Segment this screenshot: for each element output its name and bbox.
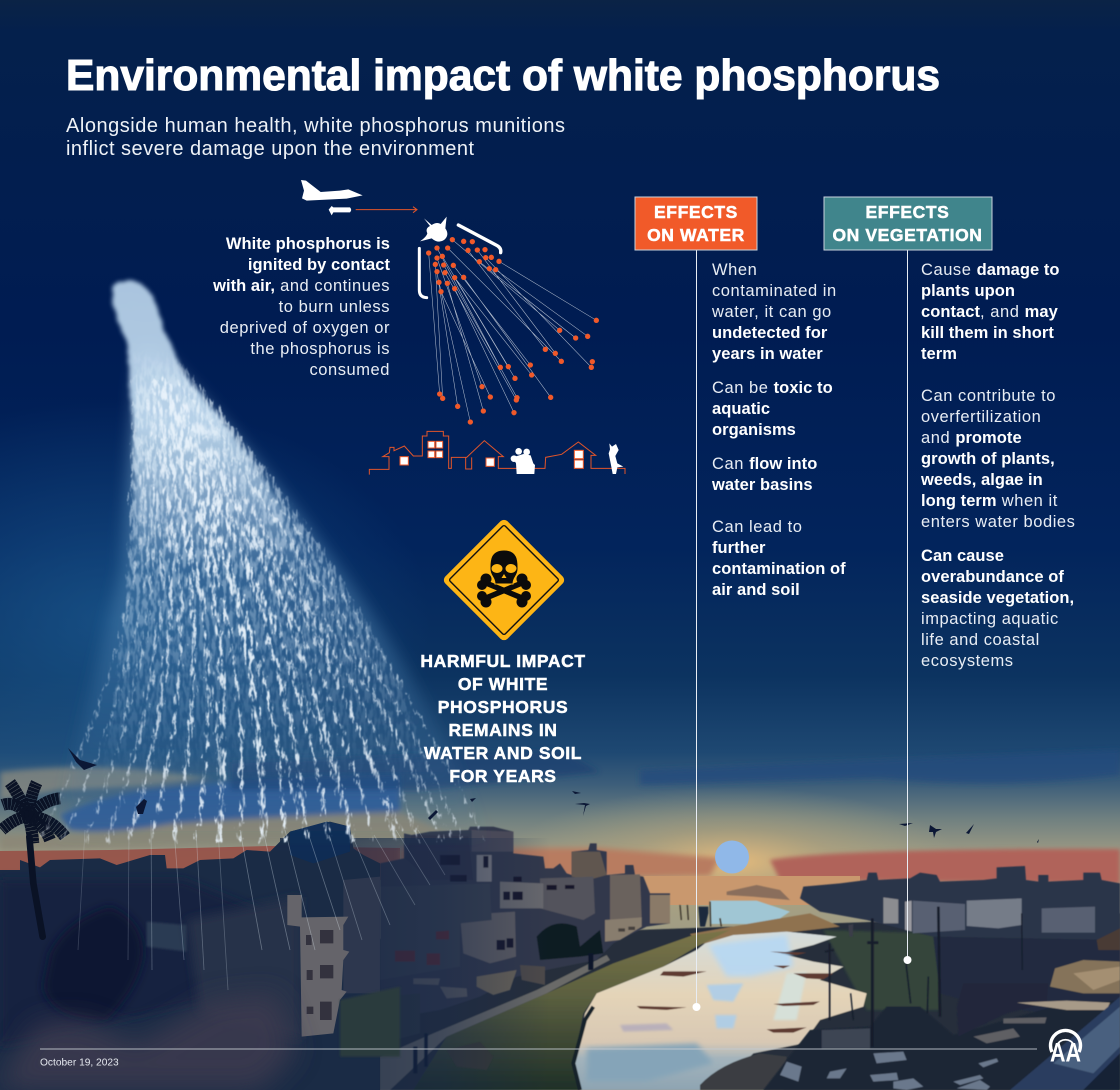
text: effects on vegetation: Cause damage to <box>921 261 1060 279</box>
subtitle <box>66 115 565 160</box>
subtitle: Alongside human health, white phosphorus munitions <box>66 115 565 137</box>
heading: effects on water: EFFECTS <box>654 202 738 222</box>
text: effects on water: water basins <box>711 476 813 494</box>
river <box>573 932 867 1090</box>
silhouettes at waterfront <box>698 907 708 927</box>
text: ignition description: ignited by contact <box>248 256 390 274</box>
text: effects on vegetation: overfertilization <box>921 408 1041 426</box>
text: effects on vegetation: contact, and may <box>921 303 1059 321</box>
icon: family silhouette <box>511 448 535 474</box>
footer rule <box>40 1048 1037 1050</box>
rubble pieces <box>780 1052 998 1090</box>
background: ruined buildings <box>380 827 790 1073</box>
text: ignition description: deprived of oxygen or <box>220 319 390 337</box>
text: effects on water: Can be toxic to <box>712 379 833 397</box>
white phosphorus plume <box>40 280 490 990</box>
text: effects on vegetation: long term when it <box>921 492 1058 510</box>
road <box>380 955 610 1090</box>
shore dark edge <box>573 1007 593 1090</box>
plume: bright core <box>112 280 300 570</box>
text: effects on vegetation <box>920 261 1075 670</box>
text: ignition description: White phosphorus is <box>226 235 390 253</box>
plume: falling threads <box>78 820 445 990</box>
leader line: vegetation <box>904 250 912 964</box>
leader line: water <box>692 250 700 1011</box>
icon: burst shell <box>420 217 447 242</box>
text: effects on water: undetected for <box>712 324 828 342</box>
phosphorus particles <box>426 237 599 425</box>
icon: missile <box>329 206 351 215</box>
wreckage at lower left <box>447 1042 493 1070</box>
text: effects on vegetation: enters water bodies <box>921 513 1075 531</box>
icon: hazard sign <box>442 518 566 642</box>
heading: effects on vegetation <box>824 197 992 250</box>
icon: Anadolu Agency logo <box>1050 1030 1081 1068</box>
text: effects on water: water, it can go <box>711 303 832 321</box>
date: October 19, 2023 <box>40 1058 119 1068</box>
callout: lasting harm: WATER AND SOIL <box>424 743 582 763</box>
text: effects on vegetation: growth of plants, <box>921 450 1055 468</box>
text: effects on vegetation: impacting aquatic <box>921 610 1059 628</box>
callout: lasting harm: PHOSPHORUS <box>438 697 568 717</box>
trajectories <box>429 240 596 422</box>
callout: lasting harm: FOR YEARS <box>449 766 557 786</box>
text: effects on water: further <box>712 539 766 557</box>
heading: effects on vegetation: EFFECTS <box>866 202 949 222</box>
text: effects on water: When <box>712 261 757 279</box>
sandy bank <box>690 913 840 944</box>
ground base <box>347 913 1120 1090</box>
text: effects on water: years in water <box>712 345 823 363</box>
pale tower <box>287 895 349 1037</box>
plume: grainy strands <box>40 380 485 840</box>
icon: house windows <box>400 441 583 468</box>
text: effects on water: organisms <box>712 421 796 439</box>
foreground sand and rubble base <box>1050 960 1120 993</box>
callout: lasting harm: OF WHITE <box>458 674 548 694</box>
windows <box>440 855 574 950</box>
background: left city silhouette <box>0 783 400 1090</box>
background: waterfront ground and river <box>347 901 1120 1090</box>
text: ignition description: with air, and continues <box>212 277 390 295</box>
plume: mottled body <box>100 350 430 780</box>
dark palms <box>537 923 603 960</box>
text: effects on water: contaminated in <box>712 282 837 300</box>
text: effects on water: contamination of <box>712 560 846 578</box>
text: ignition description: the phosphorus is <box>250 340 390 358</box>
text: effects on vegetation: plants upon <box>921 282 1015 300</box>
text: effects on vegetation: seaside vegetation, <box>921 589 1074 607</box>
background: sun <box>715 840 749 874</box>
text: effects on vegetation: Can cause <box>921 547 1004 565</box>
icon: Anadolu Agency logo: AA <box>1050 1038 1081 1068</box>
heading: effects on vegetation: ON VEGETATION <box>832 225 983 245</box>
text: ignition description: to burn unless <box>279 298 390 316</box>
text: effects on vegetation: ecosystems <box>921 652 1014 670</box>
munition diagram <box>301 180 625 475</box>
plume: soft fan glow <box>50 348 490 850</box>
background: distant right skyline <box>763 866 1120 1090</box>
icon: jet <box>301 180 363 201</box>
rising smoke <box>0 993 297 1090</box>
text: effects on water: Can lead to <box>712 518 802 536</box>
heading: effects on water: ON WATER <box>647 225 745 245</box>
far water <box>710 901 790 924</box>
text: effects on vegetation: life and coastal <box>921 631 1040 649</box>
smoke veil over buildings <box>280 838 550 1090</box>
grass <box>413 930 730 1090</box>
text: effects on vegetation: Can contribute to <box>921 387 1056 405</box>
icon: person silhouette <box>609 443 623 474</box>
text: effects on water: Can flow into <box>712 455 817 473</box>
callout: lasting harm: HARMFUL IMPACT <box>420 651 586 671</box>
arrow <box>356 207 417 213</box>
title: Environmental impact of white phosphorus <box>66 51 940 100</box>
text: effects on water: air and soil <box>712 581 800 599</box>
icon: palm tree <box>2 783 65 937</box>
subtitle: inflict severe damage upon the environment <box>66 138 474 160</box>
text: ignition description: consumed <box>309 361 390 379</box>
background: clouds <box>0 750 1120 850</box>
text: effects on vegetation: term <box>921 345 957 363</box>
callout: lasting harm: REMAINS IN <box>448 720 558 740</box>
text: ignition description <box>212 235 390 379</box>
icon: houses outline <box>369 431 625 475</box>
text: effects on water: aquatic <box>712 400 770 418</box>
callout: lasting harm <box>420 651 586 786</box>
utility poles <box>825 907 1022 1047</box>
background: horizon band <box>0 846 1120 905</box>
text: effects on vegetation: weeds, algae in <box>920 471 1043 489</box>
shore debris <box>637 952 833 1033</box>
birds <box>68 748 1039 843</box>
text: effects on vegetation: overabundance of <box>921 568 1064 586</box>
brackets <box>458 225 501 253</box>
heading: effects on water <box>635 197 757 250</box>
text: effects on vegetation: and promote <box>921 429 1022 447</box>
text: effects on water <box>711 261 846 599</box>
text: effects on vegetation: kill them in short <box>921 324 1054 342</box>
